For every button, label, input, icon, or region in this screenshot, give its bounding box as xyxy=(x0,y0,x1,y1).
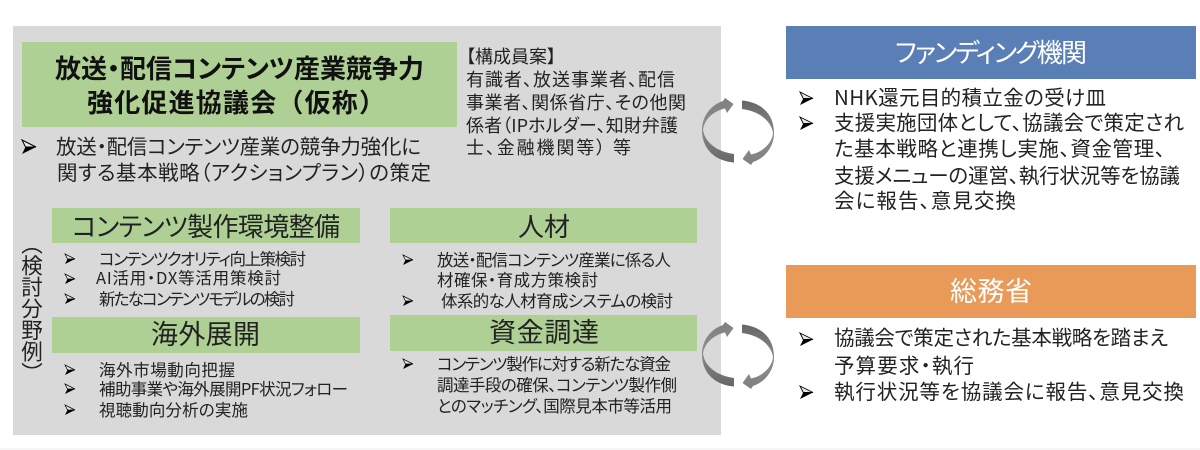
text block: proposed members: 有識者、放送事業者、配信 xyxy=(466,66,675,92)
panel: ministry: 協議会で策定された基本戦略を踏まえ xyxy=(834,321,1168,351)
section: content production: 新たなコンテンツモデルの検討 xyxy=(99,286,295,310)
section: overseas expansion: 海外市場動向把握 xyxy=(99,357,235,381)
section: fundraising: 調達手段の確保、コンテンツ製作側 xyxy=(437,372,677,396)
panel: ministry: 総務省 xyxy=(950,270,1032,309)
panel: council xyxy=(13,26,721,435)
panel: funding agency: NHK還元目的積立金の受け皿 xyxy=(834,81,1106,111)
section: human resources: 体系的な人材育成システムの検討 xyxy=(441,288,673,312)
heading: council name: 強化促進協議会（仮称） xyxy=(87,83,385,120)
panel: funding agency: 支援実施団体として、協議会で策定され xyxy=(834,106,1184,136)
heading: council name xyxy=(22,42,457,127)
text: vertical label: （検討分野例） xyxy=(16,233,48,384)
section: overseas expansion xyxy=(52,313,360,421)
section: fundraising xyxy=(390,311,697,417)
text block: council purpose xyxy=(22,130,431,186)
section: fundraising: コンテンツ製作に対する新たな資金 xyxy=(437,351,671,375)
section: overseas expansion: 海外展開 xyxy=(151,313,260,352)
text block: proposed members: 【構成員案】 xyxy=(466,43,556,69)
panel: ministry: 予算要求・執行 xyxy=(834,349,974,379)
panel: funding agency: ファンディング機関 xyxy=(895,33,1087,70)
section: human resources: 材確保・育成方策検討 xyxy=(437,267,598,291)
panel: ministry: 執行状況等を協議会に報告、意見交換 xyxy=(834,375,1184,405)
text block: proposed members: 事業者、関係省庁、その他関 xyxy=(466,89,686,115)
panel: funding agency: 会に報告、意見交換 xyxy=(834,184,1016,214)
panel: funding agency: た基本戦略と連携し実施、資金管理、 xyxy=(834,132,1165,162)
icon: cycle arrows top xyxy=(702,98,774,165)
section: fundraising: 資金調達 xyxy=(489,311,599,350)
text block: council purpose: 関する基本戦略（アクションプラン）の策定 xyxy=(57,156,431,186)
section: overseas expansion: 補助事業や海外展開PF状況フォロー xyxy=(99,376,348,400)
icon: cycle arrows bottom xyxy=(702,322,774,389)
section: human resources xyxy=(390,207,697,312)
panel: ministry xyxy=(786,265,1196,405)
heading: council name: 放送・配信コンテンツ産業競争力 xyxy=(55,49,424,86)
section: content production xyxy=(52,207,360,310)
section: fundraising: とのマッチング、国際見本市等活用 xyxy=(437,393,672,417)
section: content production: コンテンツ製作環境整備 xyxy=(72,207,340,244)
text block: proposed members: 士、金融機関等） 等 xyxy=(466,134,631,160)
text block: proposed members: 係者（IPホルダー、知財弁護 xyxy=(466,112,678,138)
text block: proposed members xyxy=(466,43,686,160)
section: content production: コンテンツクオリティ向上策検討 xyxy=(99,246,306,270)
panel: funding agency: 支援メニューの運営、執行状況等を協議 xyxy=(834,159,1180,189)
section: overseas expansion: 視聴動向分析の実施 xyxy=(99,397,248,421)
section: human resources: 放送・配信コンテンツ産業に係る人 xyxy=(437,247,672,271)
text block: council purpose: 放送・配信コンテンツ産業の競争力強化に xyxy=(56,130,421,160)
panel: funding agency xyxy=(786,26,1196,214)
section: content production: AI活用・DX等活用策検討 xyxy=(96,265,281,289)
section: human resources: 人材 xyxy=(518,207,570,244)
